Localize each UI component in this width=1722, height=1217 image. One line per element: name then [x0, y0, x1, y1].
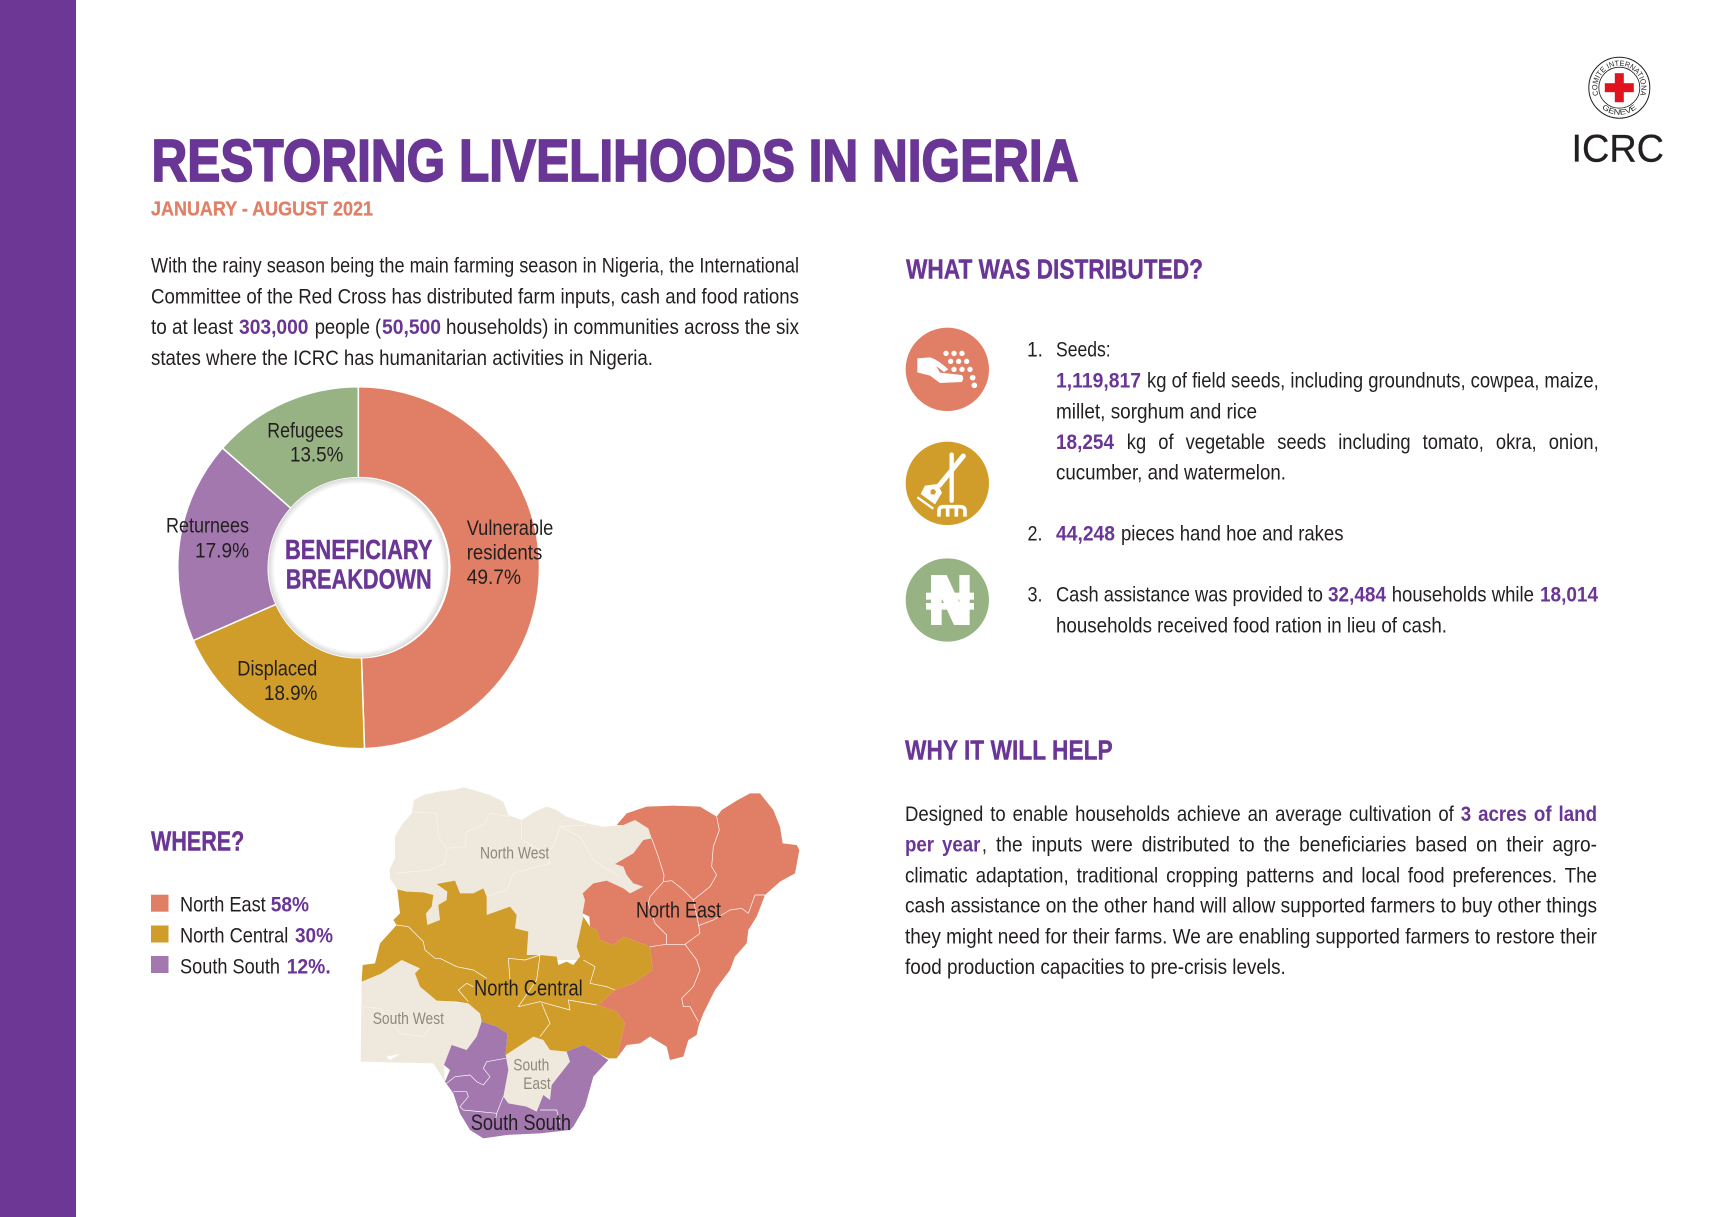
intro paragraph: people ( [315, 316, 381, 339]
label: vulnerable residents [467, 517, 553, 589]
intro paragraph: 303,000 [239, 316, 308, 339]
legend: regions: 30% [295, 925, 333, 948]
label: returnees: Returnees [166, 515, 249, 538]
logo: ICRC: GENEVE [1603, 104, 1637, 115]
icon: hand with seeds [906, 328, 989, 411]
label: vulnerable residents: Vulnerable [467, 517, 553, 540]
list item 1: seeds: Seeds: [1056, 339, 1111, 362]
paragraph: why it will help [905, 803, 1597, 979]
map label: south east: South [513, 1056, 549, 1075]
legend: regions: 58% [271, 894, 309, 917]
legend: regions: South South [180, 955, 280, 978]
paragraph: why it will help: Designed to enable households achieve an average cultivation of [905, 803, 1454, 826]
map label: north central: North Central [474, 976, 583, 1001]
list item 3: cash assistance: 3. [1028, 584, 1042, 607]
list item 1: seeds: 18,254 [1056, 431, 1114, 454]
label: displaced: 18.9% [264, 682, 317, 705]
icon: naira sign [906, 558, 989, 642]
paragraph: why it will help: per year [905, 834, 980, 857]
map label: south south: South South [471, 1110, 571, 1135]
list item 1: seeds: 1. [1027, 339, 1043, 362]
title: RESTORING LIVELIHOODS IN NIGERIA [152, 128, 1078, 194]
logo: ICRC [1572, 56, 1664, 171]
label: displaced [237, 658, 317, 705]
intro paragraph: households) in communities across the six [446, 316, 799, 339]
donut centre title [285, 534, 432, 594]
map region: north west [389, 787, 652, 960]
logo: ICRC: ICRC [1572, 128, 1664, 171]
donut hole [268, 478, 448, 658]
donut centre title: BENEFICIARY [285, 534, 432, 565]
list item 1: seeds: kg of field seeds, including groundnuts, cowpea, maize, [1147, 370, 1599, 393]
heading: where: WHERE? [151, 826, 244, 857]
list item 2: tools: 44,248 [1056, 523, 1115, 546]
map label: south west: South West [373, 1009, 444, 1028]
list item 3: cash assistance [1028, 584, 1598, 638]
map label: north west: North West [480, 844, 550, 863]
label: refugees [267, 419, 343, 467]
paragraph: why it will help: cash assistance on the other hand will allow supported farmers to buy other things [905, 895, 1597, 918]
intro paragraph: With the rainy season being the main farming season in Nigeria, the International [151, 255, 799, 278]
list item 3: cash assistance: 18,014 [1540, 584, 1598, 607]
segment: vulnerable residents [358, 387, 539, 749]
intro paragraph [151, 255, 799, 370]
map label: north east: North East [636, 897, 721, 922]
list item 1: seeds: kg of vegetable seeds including tomato, okra, onion, [1127, 431, 1599, 454]
list item 3: cash assistance: 32,484 [1328, 584, 1386, 607]
donut chart: beneficiary breakdown [166, 387, 553, 749]
list item 1: seeds: cucumber, and watermelon. [1056, 462, 1286, 485]
intro paragraph: states where the ICRC has humanitarian activities in Nigeria. [151, 347, 653, 370]
legend: regions [151, 894, 333, 978]
paragraph: why it will help: 3 acres of land [1461, 803, 1597, 826]
segment: displaced [193, 604, 364, 749]
label: refugees: 13.5% [290, 444, 343, 467]
heading: what was distributed: WHAT WAS DISTRIBUTED? [906, 253, 1203, 284]
paragraph: why it will help: , the inputs were distributed to the beneficiaries based on their agro- [982, 834, 1597, 857]
map region: north central [362, 881, 653, 1058]
list item 3: cash assistance: Cash assistance was provided to [1056, 584, 1323, 607]
label: vulnerable residents: residents [467, 541, 542, 564]
label: displaced: Displaced [237, 658, 317, 681]
donut centre title: BREAKDOWN [286, 563, 432, 594]
list item 2: tools [1028, 523, 1344, 546]
list item 2: tools: pieces hand hoe and rakes [1121, 523, 1344, 546]
label: vulnerable residents: 49.7% [467, 566, 521, 589]
intro paragraph: Committee of the Red Cross has distributed farm inputs, cash and food rations [151, 285, 799, 308]
subtitle: date range: JANUARY - AUGUST 2021 [151, 199, 373, 221]
list item 3: cash assistance: households received food ration in lieu of cash. [1056, 615, 1447, 638]
label: returnees [166, 515, 249, 563]
list item 2: tools: 2. [1028, 523, 1042, 546]
paragraph: why it will help: food production capacities to pre-crisis levels. [905, 956, 1286, 979]
list item 3: cash assistance: households while [1392, 584, 1534, 607]
label: returnees: 17.9% [195, 540, 249, 563]
paragraph: why it will help: they might need for their farms. We are enabling supported farmers to restore their [905, 925, 1597, 948]
map region: north east [583, 793, 799, 1060]
label: refugees: Refugees [267, 419, 343, 442]
heading: why it will help: WHY IT WILL HELP [905, 734, 1113, 765]
map label: south east [513, 1056, 551, 1093]
paragraph: why it will help: climatic adaptation, traditional cropping patterns and local food preferences. The [905, 864, 1597, 887]
map region: south south [444, 1022, 608, 1138]
legend: regions: North Central [180, 925, 288, 948]
map label: south east: East [523, 1074, 551, 1093]
map region: south east [503, 1037, 570, 1112]
legend: regions: 12%. [287, 955, 331, 978]
intro paragraph: to at least [151, 316, 233, 339]
list item 1: seeds [1027, 339, 1599, 485]
map region: south west [361, 960, 482, 1082]
list item 1: seeds: millet, sorghum and rice [1056, 400, 1257, 423]
icon: hoe and rake [906, 442, 989, 525]
segment: returnees [178, 448, 291, 640]
distribution list [1027, 339, 1599, 638]
list item 1: seeds: 1,119,817 [1056, 370, 1141, 393]
legend: regions: North East [180, 894, 266, 917]
purple side band [0, 0, 76, 1217]
intro paragraph: 50,500 [382, 316, 441, 339]
map: Nigeria regions [361, 787, 799, 1138]
segment: refugees [222, 387, 358, 508]
